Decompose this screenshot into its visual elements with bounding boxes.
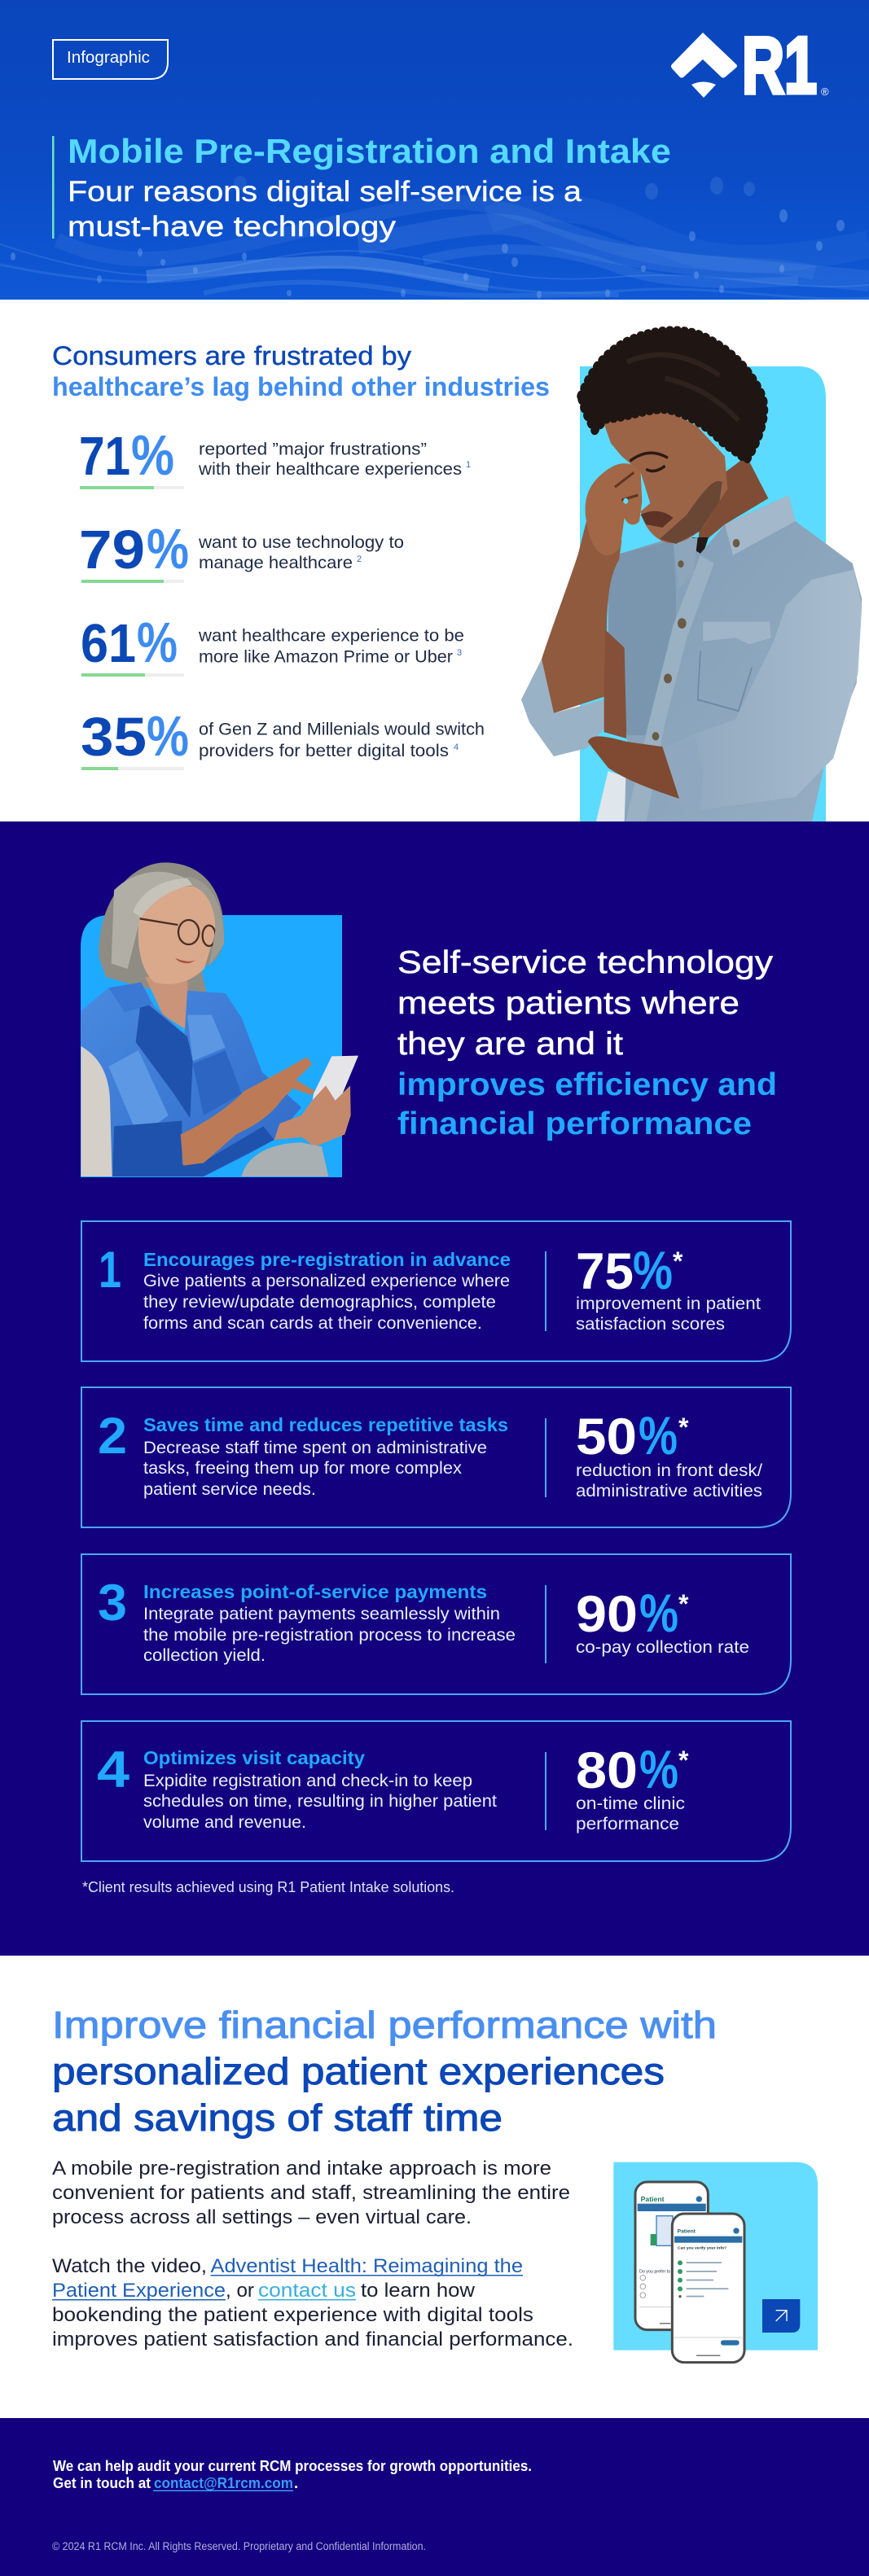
card 2: reduction in front desk/	[576, 1461, 762, 1480]
stat: 79%: 79	[79, 519, 145, 580]
title accent bar	[52, 136, 54, 239]
body paragraph 2: Adventist Health: Reimagining the	[210, 2255, 523, 2277]
card 4: %	[639, 1739, 678, 1799]
card 2: *	[678, 1413, 689, 1442]
heading: self-service: meets patients where	[397, 986, 740, 1021]
subtitle: must-have technology	[68, 211, 397, 243]
stat: 71%: with their healthcare experiences	[198, 459, 462, 479]
card 3: collection yield.	[143, 1646, 266, 1665]
card 4: 80	[576, 1742, 638, 1799]
header banner	[0, 0, 869, 300]
body paragraph 2	[52, 2255, 573, 2350]
raising hand	[586, 463, 642, 555]
hair front	[187, 877, 224, 966]
card 3: 3	[98, 1575, 127, 1632]
photo: woman with phone	[81, 862, 358, 1176]
background wave pattern	[0, 202, 869, 299]
front phone	[672, 2214, 744, 2363]
body paragraph 2: Watch the video,	[52, 2255, 207, 2277]
man's right sleeve	[662, 570, 862, 810]
call to action: contact@R1rcm.com	[154, 2474, 293, 2491]
stat: 35%: providers for better digital tools	[199, 741, 449, 760]
heading	[52, 2004, 717, 2139]
heading: self-service	[397, 945, 777, 1141]
back phone: Patient	[641, 2195, 665, 2203]
sofa	[81, 1046, 112, 1176]
stat: 79%: 2	[357, 554, 362, 564]
body paragraph 1	[52, 2158, 570, 2228]
stat: 71%: %	[131, 423, 174, 487]
heading: self-service: they are and it	[397, 1027, 623, 1062]
face	[604, 408, 727, 543]
card 3: Increases point-of-service payments	[143, 1581, 487, 1602]
stat: 35%: of Gen Z and Millenials would switch	[199, 720, 485, 739]
card 3: the mobile pre-registration process to increase	[143, 1626, 516, 1645]
heading: self-service: financial performance	[397, 1106, 752, 1141]
body paragraph 2: , or	[226, 2280, 254, 2302]
card 3: *	[678, 1589, 689, 1619]
body paragraph 1: convenient for patients and staff, streamlining the entire	[52, 2182, 570, 2204]
card 2	[81, 1387, 791, 1527]
phone	[312, 1056, 358, 1115]
shirt torso	[608, 495, 862, 822]
card 4: performance	[576, 1815, 679, 1833]
subtitle: Four reasons digital self-service is a	[68, 176, 582, 208]
heading: personalized patient experiences	[52, 2050, 665, 2092]
panel: consumers frustrated	[52, 331, 862, 822]
shirt	[81, 983, 301, 1176]
body paragraph 2: contact us	[258, 2280, 356, 2302]
card 3: co-pay collection rate	[576, 1638, 749, 1657]
lower forearm	[588, 736, 679, 799]
photo: frustrated man	[521, 331, 862, 822]
panel: self-service section	[0, 821, 869, 1956]
body paragraph 2: improves patient satisfaction and financial performance.	[52, 2328, 573, 2350]
badge: Infographic	[53, 40, 168, 79]
heading: self-service: improves efficiency and	[397, 1067, 777, 1102]
call to action: We can help audit your current RCM processes for growth opportunities.	[53, 2457, 532, 2474]
stat: 35%	[81, 704, 485, 770]
stat: 79%: manage healthcare	[199, 553, 353, 572]
back phone	[635, 2182, 708, 2330]
stat: 61%: 3	[457, 648, 462, 658]
stat: 71%: reported ”major frustrations”	[199, 440, 427, 459]
card 1: forms and scan cards at their convenience.	[143, 1314, 482, 1333]
stat: 35%: 4	[454, 743, 459, 752]
arrow button	[762, 2299, 800, 2333]
card 4: schedules on time, resulting in higher patient	[143, 1792, 497, 1811]
stat: 61%: 61	[81, 613, 136, 674]
stat: 35%: 35	[81, 707, 147, 768]
stat: 61%	[81, 611, 464, 677]
stat: 71%: 71	[79, 426, 130, 487]
placket	[625, 555, 714, 822]
stat: 35%: %	[147, 704, 189, 768]
body paragraph 1: A mobile pre-registration and intake approach is more	[52, 2158, 551, 2180]
pocket	[703, 622, 771, 645]
card 1: %	[633, 1240, 673, 1300]
card 1: *	[673, 1246, 683, 1276]
neck	[145, 975, 189, 1032]
card 2: Decrease staff time spent on administrative	[143, 1439, 487, 1457]
glasses	[140, 918, 216, 946]
stat: 79%: want to use technology to	[198, 532, 404, 552]
card 3: 90	[576, 1586, 638, 1643]
call to action	[53, 2457, 532, 2491]
logo: R1: ®	[821, 85, 829, 98]
knee	[242, 1142, 328, 1176]
card 2: patient service needs.	[143, 1480, 316, 1499]
heading: self-service: Self-service technology	[397, 945, 774, 980]
upper forearm sleeve cuff	[521, 659, 604, 756]
footer	[0, 2418, 869, 2576]
stat: 61%: %	[137, 611, 178, 674]
card 1	[81, 1221, 791, 1361]
badge: Infographic: Infographic	[67, 49, 150, 67]
card 4	[81, 1721, 791, 1861]
front phone: Can you verify your info?	[678, 2246, 726, 2251]
heading: and savings of staff time	[52, 2096, 503, 2139]
heading: healthcare’s lag behind other industries	[52, 372, 550, 401]
card 2: 50	[576, 1408, 637, 1465]
raised forearm	[542, 521, 621, 713]
back phone: Do you prefer to	[639, 2270, 670, 2275]
card 1: Encourages pre-registration in advance	[143, 1249, 511, 1270]
card 1: improvement in patient	[576, 1295, 761, 1313]
hair	[581, 331, 764, 459]
card 4: on-time clinic	[576, 1794, 685, 1813]
footnote: *Client results achieved using R1 Patient Intake solutions.	[82, 1879, 454, 1895]
card 4: Optimizes visit capacity	[143, 1747, 365, 1768]
card 1: 75	[576, 1243, 634, 1300]
forearm	[181, 1057, 315, 1166]
collar	[725, 495, 796, 555]
card 1: satisfaction scores	[576, 1315, 725, 1334]
card 4: 4	[97, 1741, 129, 1798]
title: Mobile Pre-Registration and Intake	[68, 132, 671, 170]
stat: 79%: %	[147, 517, 189, 580]
call to action: Get in touch at	[53, 2474, 151, 2491]
hair back	[99, 862, 224, 999]
stat: 71%	[79, 423, 471, 489]
stat: 79%	[79, 517, 404, 583]
subtitle	[68, 176, 582, 243]
heading	[52, 341, 550, 401]
call to action: .	[294, 2474, 298, 2491]
face	[138, 886, 215, 984]
body paragraph 2: bookending the patient experience with digital tools	[52, 2304, 533, 2326]
photo panel: cyan backdrop	[580, 366, 826, 821]
heading: Consumers are frustrated by	[52, 341, 411, 370]
copyright: © 2024 R1 RCM Inc. All Rights Reserved. Proprietary and Confidential Information.	[52, 2540, 426, 2552]
card 2: tasks, freeing them up for more complex	[143, 1459, 463, 1478]
body paragraph 2: Patient Experience	[52, 2280, 226, 2302]
card 1: Give patients a personalized experience where	[143, 1272, 510, 1290]
panel: improve financial performance	[52, 2004, 818, 2363]
stat: 71%: 1	[466, 460, 471, 470]
stat: 61%: more like Amazon Prime or Uber	[199, 646, 453, 666]
card 4: *	[678, 1746, 689, 1775]
card 1: they review/update demographics, complete	[143, 1293, 496, 1312]
body paragraph 1: process across all settings – even virtual care.	[52, 2206, 472, 2228]
buttons	[652, 539, 740, 741]
phones graphic	[613, 2162, 818, 2363]
logo: R1	[671, 20, 829, 110]
tucked hand	[604, 630, 626, 738]
body paragraph 2: to learn how	[361, 2280, 475, 2302]
photo panel: blue backdrop	[81, 915, 342, 1177]
card 4: volume and revenue.	[143, 1813, 306, 1832]
card 3: Integrate patient payments seamlessly within	[143, 1605, 500, 1623]
card 4: Expidite registration and check-in to keep	[143, 1772, 472, 1790]
stat: 61%: want healthcare experience to be	[198, 625, 464, 645]
card 2: Saves time and reduces repetitive tasks	[143, 1414, 508, 1435]
heading: Improve financial performance with	[52, 2004, 717, 2046]
holding hand	[274, 1085, 351, 1146]
logo: R1: R1	[742, 20, 817, 110]
card 1: 1	[99, 1242, 121, 1299]
card 2: 2	[98, 1408, 127, 1465]
front phone: Patient	[678, 2229, 696, 2235]
background dots	[11, 176, 845, 299]
cyan panel	[613, 2162, 818, 2350]
card 2: %	[639, 1405, 678, 1465]
neck	[698, 456, 768, 547]
card 3: %	[639, 1583, 678, 1643]
card 3	[81, 1554, 791, 1694]
white undershirt	[596, 771, 627, 822]
card 2: administrative activities	[576, 1482, 762, 1500]
